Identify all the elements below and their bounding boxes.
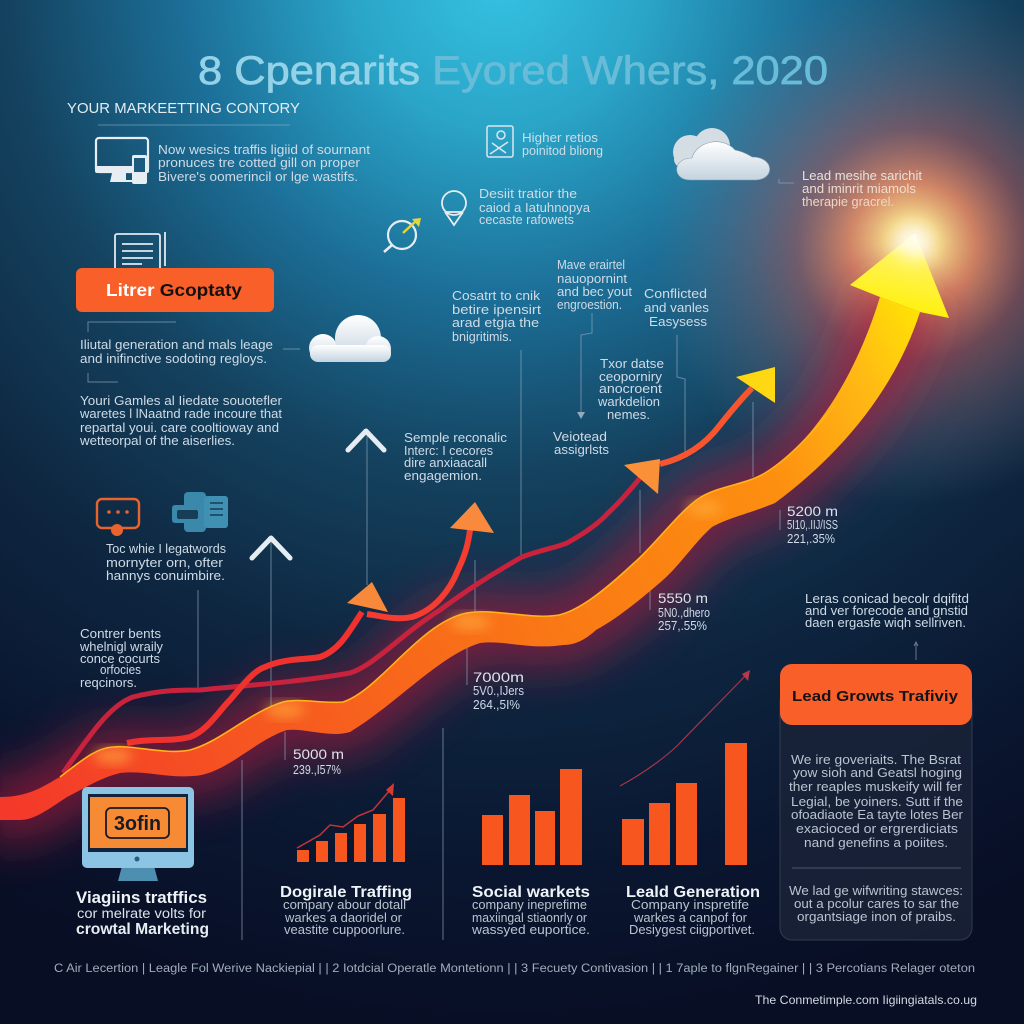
chart: main growth arrow xyxy=(0,233,949,820)
text: centre note two: engroestion. xyxy=(557,298,622,312)
text: centre note four xyxy=(597,357,664,422)
column: digital: warkes a daoridel or xyxy=(284,911,402,925)
arrow: up chevron left xyxy=(252,538,290,558)
footer credit: The Conmetimple.com Iigiingiatals.co.ug xyxy=(755,993,977,1007)
text: paragraph left: repartal youi. care cooltioway and xyxy=(80,421,279,435)
icon: monitor with label xyxy=(82,787,194,881)
stat: 5550 m xyxy=(658,590,710,633)
column: social: Social warkets xyxy=(472,884,590,901)
text: centre note two: and bec yout xyxy=(557,285,633,299)
text: centre note three: Easysess xyxy=(649,315,707,329)
stat: 5550 m: 5N0.,dhero xyxy=(658,606,710,620)
text: note left lower: orfocies xyxy=(100,663,141,677)
column: digital: veastite cuppoorlure. xyxy=(284,923,405,937)
text: higher ratios: Higher retios xyxy=(522,131,598,145)
stat: 5200 m: 221,.35% xyxy=(787,532,835,546)
text: intro note xyxy=(158,143,371,184)
text: lead note top right xyxy=(779,169,923,209)
column dividers xyxy=(242,728,443,940)
text: centre note four: anocroent xyxy=(599,382,663,396)
title: 8 Cpenarits Eyored Whers, 2020 xyxy=(198,49,828,93)
text: centre note three xyxy=(644,287,709,329)
icon: document xyxy=(115,232,165,270)
stat: 7000 m xyxy=(473,669,524,712)
column: digital: compary abour dotall xyxy=(283,898,406,912)
body text 2: We lad ge wifwriting stawces: xyxy=(789,884,963,898)
text: lead note top right: therapie gracrel. xyxy=(802,195,894,209)
text: higher ratios xyxy=(522,131,603,158)
body text xyxy=(789,753,963,850)
text: intro note: Bivere's oomerincil or lge wastifs. xyxy=(158,170,358,184)
text: centre note five xyxy=(553,430,609,457)
body text: ofoadiaote Ea tayte lotes Ber xyxy=(791,808,963,822)
text: centre note five: assigrlsts xyxy=(554,443,609,457)
text: centre note one: arad etgia the xyxy=(452,316,539,330)
body text 2 xyxy=(789,884,963,924)
stat: 7000 m: 264.,5I% xyxy=(473,698,520,712)
body text: nand genefins a poiites. xyxy=(804,836,948,850)
text: centre note four: warkdelion xyxy=(597,395,660,409)
arrowhead: first orange xyxy=(347,582,388,612)
bar chart: social xyxy=(482,769,582,865)
arrowhead: yellow xyxy=(736,367,775,403)
column: lead generation xyxy=(626,884,760,937)
chart: red growth arrows xyxy=(63,367,775,773)
text: intro note: Now wesics traffis ligiid of sournant xyxy=(158,143,371,157)
text: lead note top right: and iminrit miamols xyxy=(802,182,916,196)
stat: 5200 m xyxy=(787,503,838,546)
text: right note: and ver forecode and gnstid xyxy=(805,604,968,618)
column: social xyxy=(471,884,590,937)
column: digital xyxy=(280,884,412,937)
text: paragraph left: wetteorpal of the aiserlies. xyxy=(79,434,235,448)
footer strip: C Air Lecertion | Leagle Fol Werive Nackiepial | | 2 Iotdcial Operatle Montetionn | | 3 Fecuety Contivasion | | 1 7aple to flgnRegainer | | 3 Percotians Relager oteton xyxy=(54,963,975,975)
arrow: small down tip xyxy=(577,412,585,419)
body text: Legial, be yoiners. Sutt if the xyxy=(791,795,963,809)
arrowhead: third orange xyxy=(624,459,660,494)
text: centre note six xyxy=(404,431,507,483)
text: centre note five: Veiotead xyxy=(553,430,607,444)
orange label button xyxy=(76,268,274,312)
icon: target magnifier xyxy=(384,218,421,252)
column: social: maxiingal stiaonrly or xyxy=(472,911,587,925)
subtitle: YOUR MARKEETTING CONTORY xyxy=(67,101,300,117)
text: note left lower: conce cocurts xyxy=(80,652,160,666)
text: design note: cecaste rafowets xyxy=(479,213,574,227)
text: centre note six: Interc: I cecores xyxy=(404,444,493,458)
column: digital: Dogirale Traffing xyxy=(280,884,412,901)
text: centre note six: engagemion. xyxy=(404,469,482,483)
orange label button: Litrer Gcoptaty xyxy=(106,280,242,300)
icon: overlapping cards xyxy=(172,492,228,532)
arrowhead: second orange xyxy=(450,502,494,533)
column: lead generation: Desiygest ciigportivet. xyxy=(629,923,755,937)
bar chart: digital xyxy=(297,783,405,862)
arrowhead: main xyxy=(850,233,949,318)
text: note under icons xyxy=(106,542,226,583)
text: note under icons: Toc whie I legatwords xyxy=(106,542,226,556)
body text 2: out a pcolur cares to sar the xyxy=(794,897,959,911)
body text 2: organtsiage inon of praibs. xyxy=(797,910,956,924)
text: note under icons: hannys conuimbire. xyxy=(106,569,225,583)
stat: 5000 m xyxy=(293,746,344,777)
text: centre note six: dire anxiaacall xyxy=(404,456,487,470)
text: higher ratios: poinitod bliong xyxy=(522,144,603,158)
column: lead generation: Leald Generation xyxy=(626,884,760,901)
bar chart: lead generation xyxy=(620,670,750,865)
text: centre note four: nemes. xyxy=(607,408,650,422)
text: centre note one: bnigritimis. xyxy=(452,330,512,344)
text: centre note four: Txor datse xyxy=(600,357,664,371)
text: centre note one: Cosatrt to cnik xyxy=(452,289,541,303)
text: design note xyxy=(479,187,590,227)
stat: 5200 m: 5200 m xyxy=(787,503,838,519)
text: intro note: pronuces tre cotted gill on proper xyxy=(158,156,360,170)
text: centre note one: betire ipensirt xyxy=(452,303,542,317)
text: centre note four: ceoporniry xyxy=(599,370,663,384)
column: traffic: crowtal Marketing xyxy=(76,921,209,938)
panel heading: Lead Growts Trafiviy xyxy=(792,688,959,705)
column: lead generation: Company inspretife xyxy=(631,898,749,912)
body text: yow sioh and Geatsl hoging xyxy=(793,766,962,780)
icon: monitor top left xyxy=(95,138,149,184)
body text: We ire goveriaits. The Bsrat xyxy=(791,753,962,767)
stat: 7000 m: 5V0.,IJers xyxy=(473,684,524,698)
text: centre note two: Mave erairtel xyxy=(557,258,625,272)
text: note left lower: whelnigl wraily xyxy=(79,640,164,654)
text: centre note two: nauopornint xyxy=(557,272,628,286)
column: traffic: Viagiins tratffics xyxy=(76,888,207,907)
text: right note: Leras conicad becolr dqifitd xyxy=(805,592,969,606)
text: centre note three: and vanles xyxy=(644,301,709,315)
arrow: up chevron middle xyxy=(348,431,384,450)
text: note left lower: Contrer bents xyxy=(80,627,161,641)
text: design note: caiod a Iatuhnopya xyxy=(479,201,590,215)
column: social: company ineprefime xyxy=(472,898,587,912)
text: digital generation note: Iliutal generation and mals leage xyxy=(80,338,273,352)
body text: ther reaples muskeify will fer xyxy=(789,780,962,794)
body text: exacioced or ergrerdiciats xyxy=(796,822,958,836)
chart: main arrow glow xyxy=(0,297,920,820)
icon: location pin xyxy=(442,191,466,225)
text: paragraph left: waretes l lNaatnd rade incoure that xyxy=(79,407,283,421)
stat: 5200 m: 5I10,.IIJ/ISS xyxy=(787,518,838,532)
text: note under icons: mornyter orn, ofter xyxy=(106,556,223,570)
text: note left lower: reqcinors. xyxy=(80,676,137,690)
column: social: wassyed euportice. xyxy=(471,923,590,937)
sun core xyxy=(898,226,930,258)
icon: document with pen xyxy=(487,126,513,157)
column: traffic xyxy=(76,888,209,938)
icon: cloud top xyxy=(673,128,770,180)
text: centre note one xyxy=(452,289,542,344)
text: digital generation note xyxy=(80,322,300,382)
panel heading xyxy=(780,664,972,725)
column: lead generation: warkes a canpof for xyxy=(633,911,747,925)
text: digital generation note: and inifinctive sodoting regloys. xyxy=(80,352,267,366)
column: traffic: cor melrate volts for xyxy=(77,906,207,921)
connector lines xyxy=(198,313,780,760)
text: lead note top right: Lead mesihe sarichit xyxy=(802,169,923,183)
icon: monitor with label: 3ofin xyxy=(114,813,161,835)
icon: cloud left xyxy=(309,315,391,362)
text: centre note two xyxy=(557,258,633,312)
icon: chat bubble xyxy=(97,499,139,536)
stat: 5550 m: 257,.55% xyxy=(658,619,707,633)
text: centre note six: Semple reconalic xyxy=(404,431,507,445)
stat: 5000 m: 5000 m xyxy=(293,746,344,762)
text: paragraph left xyxy=(79,394,283,448)
stat: 5000 m: 239.,I57% xyxy=(293,763,341,777)
stat: 7000 m: 7000m xyxy=(473,669,524,685)
text: right note xyxy=(805,592,969,660)
panel: lead growth traffic xyxy=(780,664,972,940)
text: centre note three: Conflicted xyxy=(644,287,707,301)
text: paragraph left: Youri Gamles al Iiedate souotefler xyxy=(80,394,282,408)
stat: 5550 m: 5550 m xyxy=(658,590,708,606)
text: right note: daen ergasfe wiqh sellriven. xyxy=(805,616,966,630)
text: design note: Desiit tratior the xyxy=(479,187,577,201)
text: note left lower xyxy=(79,627,164,690)
